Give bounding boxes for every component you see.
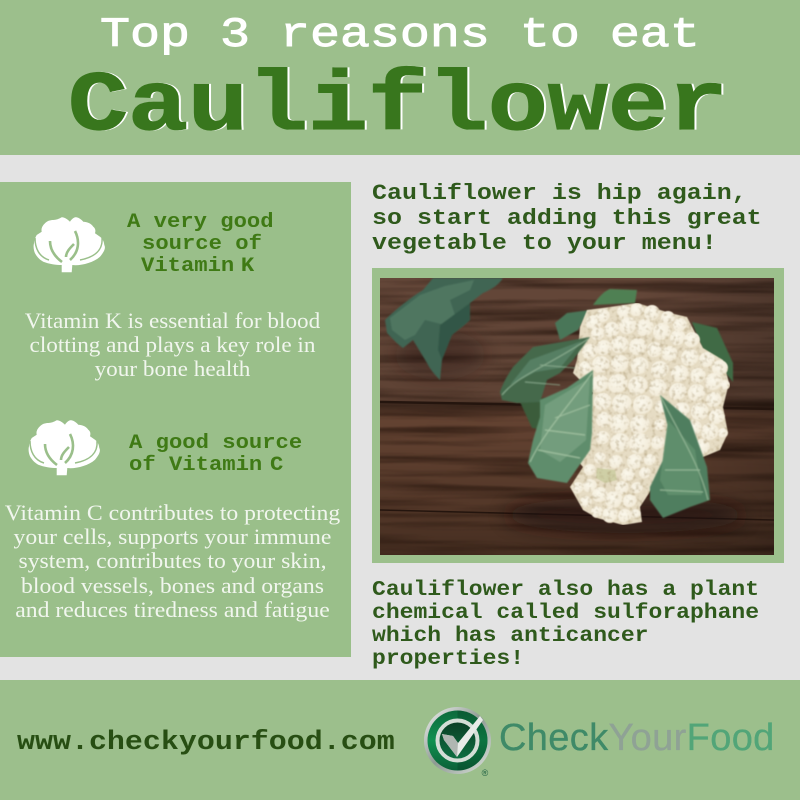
closing text: properties! — [372, 648, 524, 671]
text: Vitamin C — [5, 500, 340, 622]
heading: Vitamin C: of Vitamin C — [129, 454, 283, 477]
closing text: which has anticancer — [372, 625, 648, 648]
closing text — [372, 579, 759, 671]
header band — [0, 0, 800, 155]
text: Vitamin C: blood vessels, bones and organs — [21, 573, 324, 598]
heading: Vitamin K: source of — [142, 233, 262, 256]
text: Vitamin K: your bone health — [95, 356, 250, 381]
text: Vitamin K — [25, 308, 320, 381]
panel: vitamins — [0, 182, 351, 657]
intro text — [372, 180, 762, 256]
cauliflower front leaves — [500, 337, 710, 518]
heading: Vitamin K: A very good — [127, 211, 274, 234]
text: Vitamin K: Vitamin K is essential for blood — [25, 308, 320, 333]
heading: Vitamin K — [127, 211, 274, 278]
text: Vitamin C: your cells, supports your immune — [14, 524, 331, 549]
photo: cauliflower on wooden table — [380, 278, 774, 555]
icon: CheckYourFood logo — [424, 707, 491, 778]
cauliflower head — [560, 303, 730, 525]
heading: Vitamin C — [129, 432, 302, 477]
text: Vitamin C: system, contributes to your skin, — [18, 548, 326, 573]
heading: Vitamin C: A good source — [129, 432, 302, 455]
title: Cauliflower shadow and word: Cauliflower — [68, 60, 728, 155]
icon: cauliflower C — [28, 420, 100, 476]
website url: www.checkyourfood.com — [17, 728, 395, 758]
icon: CheckYourFood logo: ® — [482, 768, 489, 778]
title line: Top 3 reasons to eat — [100, 10, 700, 58]
title: Cauliflower shadow and word: Cauliflower — [70, 60, 730, 155]
footer band — [0, 680, 800, 800]
closing text: chemical called sulforaphane — [372, 602, 759, 625]
cauliflower back leaves — [520, 289, 733, 430]
text: Vitamin C: and reduces tiredness and fatigue — [15, 597, 330, 622]
intro text: vegetable to your menu! — [372, 230, 717, 256]
heading: Vitamin K: Vitamin K — [141, 255, 254, 278]
leaf pile upper left — [385, 278, 503, 380]
intro text: Cauliflower is hip again, — [372, 180, 747, 206]
logo wordmark: CheckYourFood — [499, 717, 775, 759]
icon: cauliflower K — [34, 217, 105, 272]
intro text: so start adding this great — [372, 205, 762, 231]
photo frame — [372, 268, 784, 563]
text: Vitamin K: clotting and plays a key role in — [30, 332, 315, 357]
closing text: Cauliflower also has a plant — [372, 579, 759, 602]
text: Vitamin C: Vitamin C contributes to protecting — [5, 500, 340, 525]
